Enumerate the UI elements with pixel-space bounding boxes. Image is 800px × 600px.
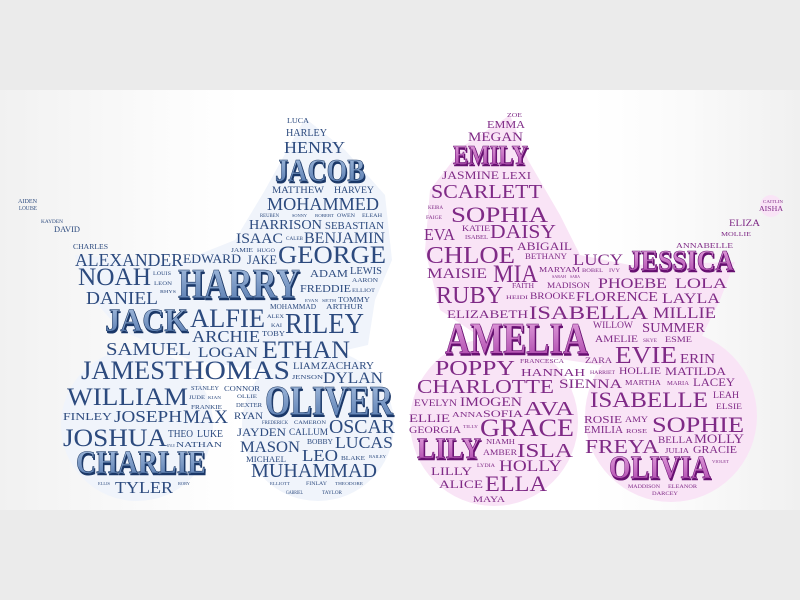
text block: right wheel names: OLLIE [237,395,257,400]
text block: left wheel names: LILLY [431,464,472,478]
text block: hood names: ROBERT [315,213,334,218]
silhouette: pink stroller [410,115,782,506]
text block: right wheel names: JAYDEN [237,425,286,439]
text block: body names: JAMES [81,356,165,385]
text block: hood names: BENJAMIN [304,230,385,247]
text block: body names: FLORENCE [576,290,658,305]
text block: left wheel names [63,384,228,497]
text block: right wheel names: ZARA [585,356,612,365]
text block: right wheel names: EMILIA [584,425,624,436]
text block: left wheel names: GEORGIA [409,425,462,435]
text block: right wheel names: CONNOR [224,385,260,393]
text block: left wheel names: ELLIS [98,481,110,486]
text block: hood names [231,117,386,269]
text block: left wheel names: SOFIA [483,409,524,419]
text block: left wheel names: IMOGEN [460,394,523,409]
text block: body names: MILLIE [653,305,716,322]
text block: hood names: ZOE [507,113,522,119]
text block: right wheel names: ELEANOR [668,485,698,490]
text block: right wheel names: RYAN [234,411,264,421]
text block: hood names: ELEAH [362,214,382,219]
text block: handle names: ELIZA [729,218,761,228]
text block: body names: EVAN [305,298,318,303]
text block: right wheel names: MOLLY [694,431,745,446]
text block: hood names: HENRY [284,138,345,157]
text block: hood names: MATTHEW [272,186,324,196]
text block: right wheel names: THEODORE [335,481,363,486]
text block: hood names: JAMIE [231,248,253,254]
name: JACOB: JACOB [275,152,365,188]
text block: hood names [424,113,624,269]
text block: left wheel names: MAX [183,407,228,428]
text block: right wheel names: DARCEY [652,492,678,497]
name: OLIVIA: OLIVIA [609,450,711,486]
text block: right wheel names: HARRIET [590,371,615,376]
text block: body names: ALEXANDER [75,250,183,270]
name: EMILY: EMILY [453,140,528,170]
text block: hood names: EVA [424,225,456,244]
text block: body names: FREDDIE [300,283,351,295]
text block: left wheel names: FRANKIE [191,405,222,411]
text block: body names: LEON [154,282,173,287]
text block: body names: LOLA [675,276,727,292]
text block: body names: KAI [271,324,282,329]
text block: body names: ARCHIE [192,327,260,346]
text block: body names: ELIZABETH [447,307,528,321]
text block: right wheel names: MASON [240,439,300,456]
text block: hood names: LEXI [502,170,531,182]
text block: body names: ETHAN [262,337,350,364]
text block: right wheel names: OSCAR [329,416,396,438]
text block: hood names: HARRISON [249,218,322,233]
text block: right wheel names: SOPHIE [652,412,744,437]
text block: hood names: HUGO [257,249,275,254]
text block: body names [75,250,383,387]
text block: left wheel names: NIAMH [486,438,515,446]
name: CHARLIE: CHARLIE [76,445,206,481]
text block: body names: SKYE [643,339,657,344]
text block: right wheel names: AMY [625,415,648,424]
text block: body names: HEIDI [506,296,529,301]
text block: body names: ARTHUR [326,303,363,311]
text block: body names: DANIEL [86,288,158,308]
text block: body names: BROOKE [530,291,576,301]
text block: right wheel names: MICHAEL [246,455,286,464]
text block: hood names: MEGAN [468,129,524,144]
text block: hood names: SONNY [292,213,307,218]
text block: right wheel names: LUCAS [335,433,393,452]
text block: body names: EDWARD [183,251,241,266]
text block: handle names: CAITLIN [763,199,783,204]
text block: right wheel names: EVIE [615,343,677,369]
text block: body names: FAITH [512,282,534,290]
text block: hood names: REUBEN [260,214,279,219]
text block: body names: MADISON [547,281,590,290]
text block: left wheel names: STANLEY [191,386,220,392]
text block: hood names: ISAAC [236,231,283,247]
text block: body names: MARYAM [539,266,581,274]
text block: hood names: CHLOE [426,243,515,269]
name: JESSICA: JESSICA [628,246,735,277]
text block: left wheel names: TYLER [115,478,174,497]
text block: handle names: AIDEN [18,198,37,205]
text block: hood names: JAKE [247,252,277,267]
text block: body names: LOGAN [198,345,258,361]
text block: hood names: JASMINE [442,168,499,182]
text block: right wheel names: MATILDA [665,364,726,378]
text block: right wheel names: ROSIE [584,414,622,426]
text block: left wheel names: AVA [524,398,575,420]
text block: handle names: DAVID [54,225,80,234]
text block: handle names: CHARLES [73,242,108,251]
text block: body names: MIA [493,261,538,288]
text block: left wheel names: NATHAN [176,441,222,449]
text block: left wheel names: KIAN [208,395,221,400]
text block: body names: ISABELLA [529,303,648,324]
text block: right wheel names: ELSIE [716,402,742,411]
text block: right wheel names: LEO [302,446,338,465]
text block: right wheel names: CAMERON [294,421,326,426]
text block: body names: LIAM [293,361,320,371]
text block: body names: NOAH [78,264,151,291]
text block: left wheel names: JOSHUA [63,425,167,452]
text block: left wheel names: CHARLOTTE [417,376,554,398]
text block: body names: DYLAN [323,370,383,387]
silhouette: blue stroller [61,118,394,501]
text block: left wheel names: THEO [168,429,193,440]
text block: right wheel names: SIENNA [559,376,623,391]
text block: right wheel names: GRACIE [693,445,737,456]
text block: right wheel names: MADDISON [628,485,660,490]
text block: left wheel names: JUDE [189,396,205,401]
text block: hood names: ISABEL [465,235,488,241]
text block: left wheel names: ELLIE [409,411,450,425]
text block: handle names [676,199,783,250]
text block: right wheel names: ERIN [680,352,715,367]
text block: hood names: SEBASTIAN [325,221,384,232]
text block: hood names: LUCA [287,117,309,125]
text block: body names: ALFIE [190,304,265,333]
text block: body names: SUMMER [642,321,706,336]
text block: hood names: KATIE [462,224,490,233]
text block: right wheel names: DEXTER [236,403,262,409]
text block: right wheel names: JULIA [665,447,689,455]
text block: left wheel names: FRANCESCA [520,359,565,365]
text block: body names: IVY [609,269,620,274]
text block: left wheel names: AMBER [483,448,518,457]
name: LILY: LILY [417,432,481,465]
text block: hood names: KEIRA [428,206,443,211]
text block: body names: SARA [570,274,580,279]
text block: right wheel names: FREDERICK [262,421,288,426]
text block: right wheel names: BLAKE [341,456,365,462]
text block: right wheel names: LACEY [693,375,735,389]
text block: handle names: LOUISE [19,206,37,212]
text block: right wheel names: MARTHA [625,379,661,387]
text block: body names: LOUIS [153,272,171,277]
text block: right wheel names: ISABELLE [590,387,708,412]
text block: body names: LAYLA [662,291,720,307]
text block: body names [427,246,735,363]
text block: left wheel names: EVELYN [414,398,458,408]
text block: right wheel names [559,343,745,497]
text block: right wheel names: BAILEY [369,454,386,459]
text block: hood names: HARVEY [334,186,374,196]
text block: handle names: KAYDEN [41,220,63,225]
text block: left wheel names: ALICE [439,477,483,491]
text block: right wheel names: GABRIEL [286,491,303,496]
text block: right wheel names: ELLIOTT [270,481,291,486]
text block: handle names: MOLLIE [721,231,751,238]
text block: hood names: CALEB [286,237,304,242]
text block: left wheel names: TILLY [463,424,478,429]
text block: body names: TOBY [262,330,285,338]
text block: left wheel names: JOSEPH [114,407,182,426]
text block: body names: THOMAS [165,356,290,385]
text block: body names: AARON [352,278,379,284]
text block: right wheel names: FREYA [585,436,660,458]
text block: body names: LEWIS [350,266,382,277]
text block: hood names: FAIGE [426,216,442,221]
text block: left wheel names: HANNAH [521,367,585,379]
text block: left wheel names: ANNA [452,411,483,419]
text block: left wheel names: ISLA [517,440,574,462]
text block: left wheel names: HOLLY [499,458,563,475]
text block: hood names: DAISY [490,221,556,243]
text block: right wheel names: ROSE [626,429,647,435]
name: AMELIA: AMELIA [445,314,588,363]
text block: body names: ELLIOT [352,289,375,294]
text block: hood names: ABIGAIL [517,239,572,253]
text block: body names: ESME [665,335,692,344]
text block: right wheel names: HOLLIE [619,366,662,376]
text block: left wheel names [409,356,585,504]
panel: blue stroller of boys names [18,117,396,501]
text block: left wheel names: FINLEY [63,411,112,423]
text block: left wheel names: ELLA [485,471,547,496]
text block: hood names: LUCY [573,252,624,269]
text block: body names: RILEY [285,308,364,340]
text block: left wheel names: GRACE [480,415,574,442]
text block: body names: TOMMY [338,296,370,304]
name: HARRY: HARRY [178,262,300,308]
text block: body names: SAMUEL [106,339,191,359]
text block: hood names: EMMA [487,120,526,131]
text block: left wheel names: RORY [178,481,190,486]
text block: hood names: MOHAMMED [267,194,379,214]
text block: right wheel names: MUHAMMAD [251,460,377,482]
panel: pink stroller of girls names [409,113,783,506]
text block: hood names: GEORGE [278,242,386,269]
text block: right wheel names [224,379,396,496]
text block: hood names: SOPHIA [451,202,548,227]
text block: body names: RHYS [160,289,176,294]
text block: body names: WILLOW [593,320,634,330]
text block: left wheel names: MAYA [473,495,505,504]
text block: right wheel names: LEAH [713,390,740,400]
text block: body names: RUBY [436,283,503,309]
text block: body names: BOBEL [582,269,603,274]
text block: body names: ADAM [310,268,348,280]
text block: body names: ZACHARY [321,361,374,372]
text block: handle names [18,198,108,251]
name: OLIVER: OLIVER [265,379,394,425]
text block: left wheel names: LUKE [197,429,223,440]
background band [0,90,800,510]
text block: body names: MOHAMMAD [270,303,316,311]
text block: left wheel names: POPPY [435,356,515,380]
text block: body names: AMELIE [595,334,639,344]
text block: body names: JENSON [292,374,323,381]
text block: handle names: AISHA [759,205,783,213]
text block: hood names: SCARLETT [431,181,542,203]
text block: left wheel names: KYLE [167,443,175,448]
text block: left wheel names: WILLIAM [67,384,188,411]
text block: left wheel names: LYDIA [477,464,495,469]
text block: hood names: BETHANY [525,252,567,261]
text block: handle names: ANNABELLE [676,241,734,250]
text block: right wheel names: FINLAY [306,482,327,487]
text block: right wheel names: BELLA [658,435,694,445]
name: JACK: JACK [105,303,188,339]
text block: right wheel names: MARIA [667,381,690,387]
text block: body names: SARAH [552,274,566,279]
text block: hood names: OWEN [337,214,355,219]
text block: right wheel names: BOBBY [307,438,333,446]
text block: right wheel names: TAYLOR [322,491,343,496]
text block: body names: SETH [322,298,336,303]
text block: body names: ALEX [267,315,284,320]
text block: body names: PHOEBE [598,276,667,292]
text block: right wheel names: VIOLET [712,459,730,464]
text block: body names: MAISIE [427,266,487,282]
text block: hood names: HARLEY [286,128,327,139]
text block: right wheel names: CALLUM [289,427,328,437]
